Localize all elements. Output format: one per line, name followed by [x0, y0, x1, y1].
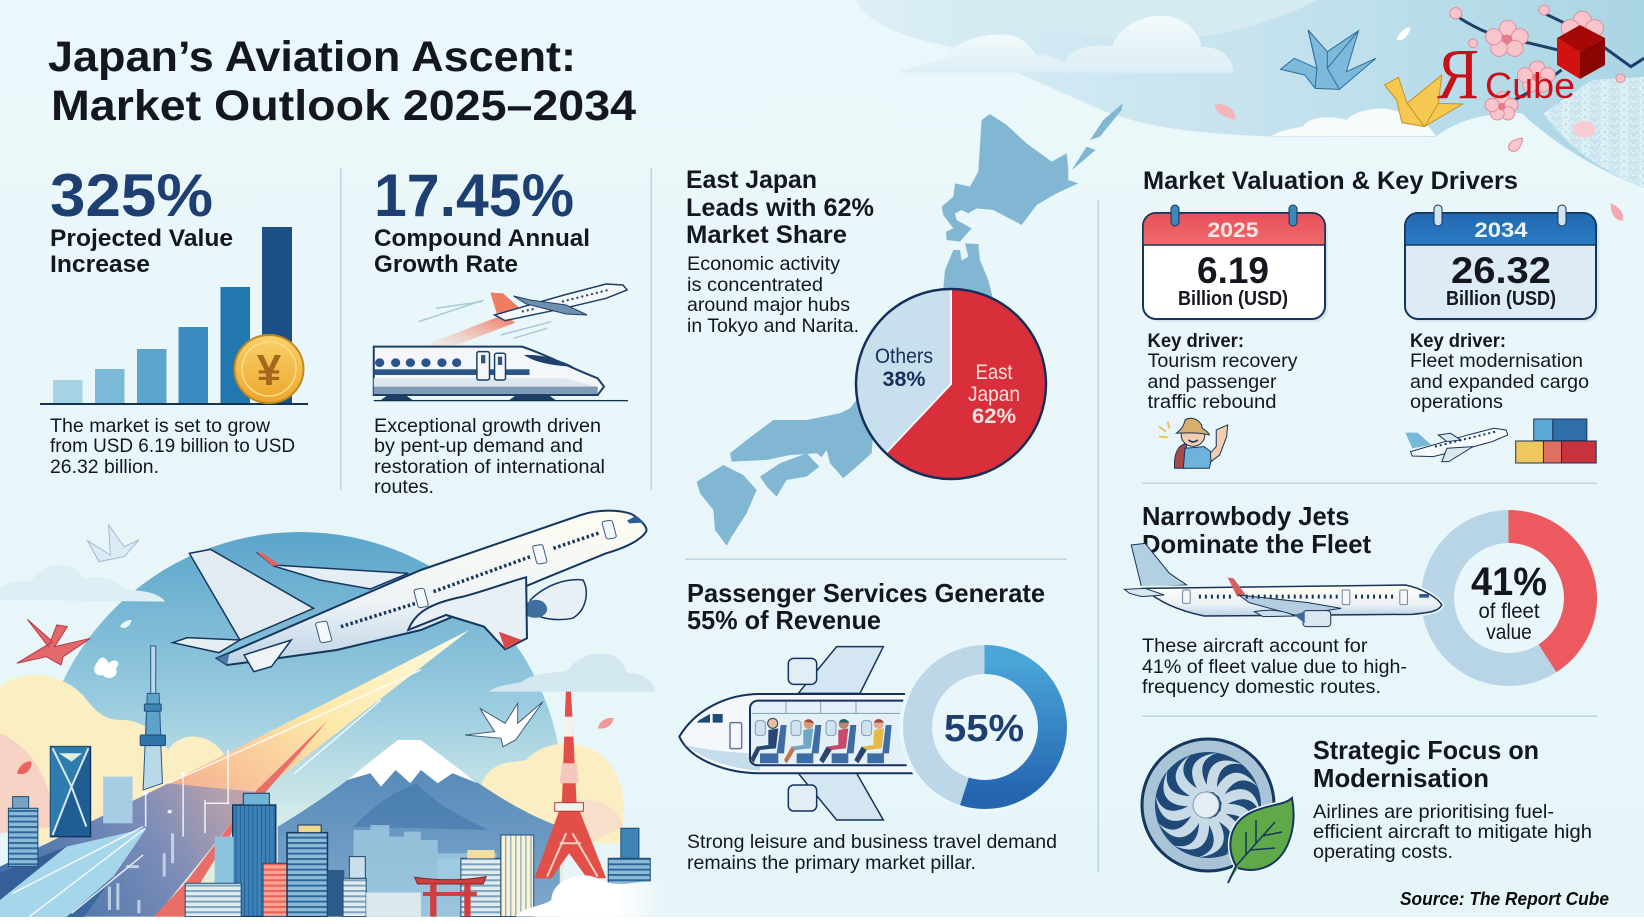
- bar chart with yen coin: [40, 227, 308, 405]
- pie chart: Others: [875, 345, 933, 368]
- stat: 17.45%: 17.45%: [374, 162, 574, 229]
- cabin cutaway airplane: [679, 647, 913, 820]
- description: routes.: [374, 476, 434, 498]
- logo wordmark: Cube: [1485, 65, 1575, 106]
- stat label: Compound Annual: [374, 225, 590, 252]
- key driver 2025: and passenger: [1148, 371, 1277, 393]
- panel: market valuation and key drivers: [1143, 167, 1599, 468]
- origami cranes: [17, 525, 543, 747]
- stat: 325%: 325%: [50, 162, 213, 229]
- logo cube: [1557, 25, 1605, 79]
- icon: plane and bullet train: [374, 284, 628, 401]
- pie chart: [856, 289, 1046, 479]
- illustration: Tokyo skyline with Mount Fuji and departing airliner: [0, 511, 660, 917]
- description: around major hubs: [687, 294, 850, 316]
- key driver 2034: Fleet modernisation: [1410, 350, 1583, 372]
- description: is concentrated: [687, 274, 823, 296]
- sky dome: [37, 532, 563, 917]
- heading: Strategic Focus on: [1313, 735, 1539, 765]
- heading: Dominate the Fleet: [1142, 529, 1371, 559]
- donut chart: 41%: [1438, 526, 1580, 670]
- stat label: Projected Value: [50, 225, 233, 252]
- icon: yen coin: ¥: [257, 346, 282, 395]
- description: The market is set to grow: [50, 415, 271, 437]
- description: [687, 253, 859, 337]
- key driver 2025: Key driver:: [1148, 330, 1244, 352]
- rainbow beam: [0, 630, 469, 917]
- donut chart: 41%: 41%: [1471, 560, 1547, 604]
- title: [48, 33, 636, 130]
- heading: [686, 166, 874, 249]
- Tokyo Skytree: [140, 646, 165, 790]
- stat label: [50, 225, 233, 278]
- description: efficient aircraft to mitigate high: [1313, 821, 1592, 843]
- icon: waving tourist: [1159, 418, 1228, 468]
- heading: [1313, 735, 1539, 793]
- source credit: Source: The Report Cube: [1400, 889, 1609, 909]
- description: restoration of international: [374, 456, 605, 478]
- description: [1313, 801, 1592, 863]
- petals: [1215, 27, 1623, 221]
- white clouds: [0, 565, 660, 917]
- stat label: Increase: [50, 251, 150, 278]
- panel: projected value increase: [40, 162, 308, 478]
- description: 41% of fleet value due to high-: [1142, 656, 1407, 678]
- calendar card: 2034: 2034: [1474, 219, 1528, 242]
- description: operating costs.: [1313, 841, 1453, 863]
- pie chart: 38%: [882, 368, 926, 391]
- logo wordmark: [1437, 34, 1575, 114]
- skyline buildings: [8, 747, 650, 917]
- pie chart: Japan: [968, 383, 1020, 406]
- donut chart: 55%: 55%: [944, 708, 1024, 750]
- heading: 55% of Revenue: [687, 605, 881, 635]
- large airliner: [173, 511, 646, 672]
- panel: narrowbody jets: [1124, 501, 1580, 698]
- description: 26.32 billion.: [50, 456, 159, 478]
- yellow clouds: [0, 675, 624, 857]
- branch and cherry blossoms: [1450, 5, 1644, 120]
- icon: turbofan with leaf: [1142, 739, 1294, 883]
- heading: Market Share: [686, 221, 847, 249]
- description: [374, 415, 605, 498]
- description: [687, 831, 1057, 874]
- key driver 2025: [1148, 330, 1298, 413]
- donut chart: 55%: [899, 641, 1071, 813]
- stat label: Growth Rate: [374, 251, 518, 278]
- icon: aircraft with cargo containers: [1405, 419, 1596, 463]
- heading: [687, 578, 1045, 635]
- panel: passenger services: [679, 578, 1071, 874]
- description: by pent-up demand and: [374, 435, 583, 457]
- heading: East Japan: [686, 166, 817, 194]
- containers: [1516, 419, 1596, 463]
- calendar card: 2034: [1405, 205, 1599, 322]
- panel: strategic focus on modernisation: [1142, 735, 1592, 883]
- description: These aircraft account for: [1142, 635, 1368, 657]
- description: in Tokyo and Narita.: [687, 315, 859, 337]
- description: from USD 6.19 billion to USD: [50, 435, 295, 457]
- panel: compound annual growth rate: [374, 162, 628, 498]
- torii gate: [415, 877, 486, 917]
- description: [50, 415, 295, 478]
- pie chart: East: [976, 361, 1013, 384]
- logo wordmark: Я: [1437, 34, 1479, 114]
- calendar card: 2034: 26.32: [1451, 250, 1551, 291]
- icon: blue origami crane: [1280, 30, 1376, 89]
- description: frequency domestic routes.: [1142, 676, 1381, 698]
- icon: yen coin: [234, 335, 304, 403]
- donut chart: 41%: of fleet: [1478, 600, 1540, 623]
- key driver 2025: Tourism recovery: [1148, 350, 1298, 372]
- stat label: [374, 225, 590, 278]
- top right sky decoration: [857, 0, 1644, 188]
- description: [1142, 635, 1407, 698]
- icon: yellow origami crane: [1385, 75, 1463, 127]
- calendar card: 2025: 2025: [1208, 219, 1259, 242]
- description: Economic activity: [687, 253, 840, 275]
- description: Airlines are prioritising fuel-: [1313, 801, 1554, 823]
- key driver 2034: [1410, 330, 1589, 413]
- description: Exceptional growth driven: [374, 415, 601, 437]
- donut chart: 41%: value: [1486, 621, 1532, 644]
- panel: East Japan market share: [686, 103, 1123, 546]
- key driver 2034: Key driver:: [1410, 330, 1506, 352]
- calendar card: 2025: [1143, 205, 1328, 322]
- title: Japan’s Aviation Ascent:: [48, 33, 576, 81]
- description: Strong leisure and business travel demand: [687, 831, 1057, 853]
- decorative origami and blossoms: [1215, 5, 1644, 221]
- heading: Leads with 62%: [686, 194, 874, 222]
- calendar card: 2025: 6.19: [1197, 250, 1269, 291]
- key driver 2034: and expanded cargo: [1410, 371, 1589, 393]
- narrowbody airplane: [1124, 543, 1442, 627]
- title: Market Outlook 2025–2034: [51, 82, 636, 130]
- blossom petals: [17, 620, 614, 774]
- heading: Market Valuation & Key Drivers: [1143, 167, 1518, 195]
- key driver 2025: traffic rebound: [1148, 391, 1276, 413]
- pie chart: 62%: [972, 405, 1016, 428]
- seated passengers: [751, 718, 892, 763]
- map of Japan: [697, 103, 1123, 546]
- description: remains the primary market pillar.: [687, 852, 976, 874]
- heading: Narrowbody Jets: [1142, 501, 1350, 531]
- Mount Fuji: [278, 740, 560, 917]
- heading: [1142, 501, 1371, 559]
- logo: RCube: [1437, 25, 1605, 114]
- heading: Modernisation: [1313, 763, 1489, 793]
- heading: Passenger Services Generate: [687, 578, 1045, 608]
- calendar card: 2025: Billion (USD): [1178, 288, 1288, 310]
- calendar card: 2034: Billion (USD): [1446, 288, 1556, 310]
- key driver 2034: operations: [1410, 391, 1503, 413]
- small airliner: [1405, 428, 1508, 462]
- Tokyo Tower: [535, 675, 606, 878]
